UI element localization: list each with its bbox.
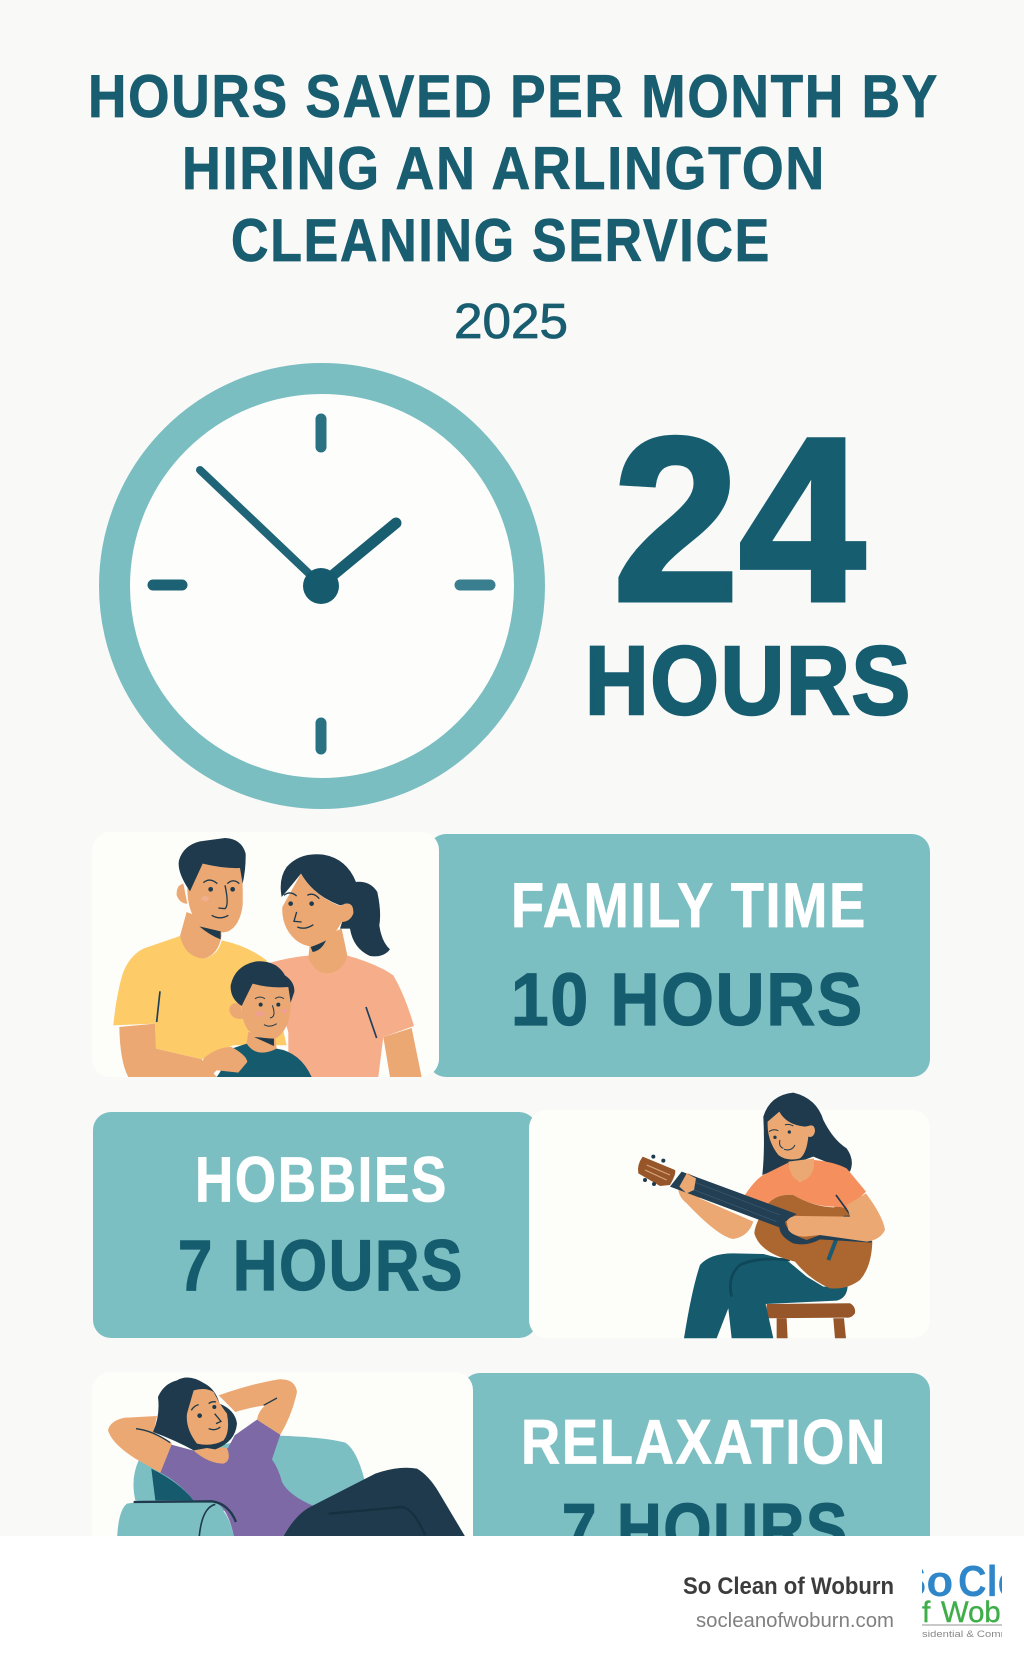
illustration: family (113, 838, 422, 1077)
chest skin (194, 1445, 229, 1464)
fretting fingers (679, 1173, 696, 1193)
illustration: woman playing guitar (638, 1093, 885, 1338)
logo, cropped (897, 1557, 1024, 1639)
panel background white (92, 1372, 473, 1562)
left arm (678, 1173, 753, 1239)
panel background teal (93, 1112, 537, 1338)
face (768, 1112, 815, 1159)
logo, cropped: So (897, 1557, 953, 1606)
logo, cropped: sidential & Comm (922, 1629, 1010, 1639)
year subtitle: 2025 (454, 295, 568, 349)
arms (108, 1416, 172, 1473)
chair arm (117, 1503, 237, 1562)
illustration: woman relaxing in armchair (108, 1378, 480, 1562)
neck (788, 1158, 814, 1181)
right arm (787, 1193, 885, 1242)
panel background teal (462, 1373, 930, 1563)
panel background white (92, 832, 439, 1077)
boy (217, 1044, 312, 1077)
panel: relaxation (92, 1372, 930, 1570)
value: 7 hours, cut off: 7 HOURS (562, 1490, 849, 1570)
footer (0, 1536, 1024, 1666)
heading: family time: FAMILY TIME (511, 871, 867, 941)
headstock (638, 1157, 675, 1186)
man (113, 936, 287, 1059)
title: HOURS SAVED PER MONTH BY (88, 63, 939, 130)
footer background (0, 1536, 1024, 1666)
guitar neck (670, 1172, 872, 1244)
website: socleanofwoburn.com (696, 1610, 894, 1632)
torso (160, 1420, 314, 1562)
panel: family time (92, 832, 930, 1077)
title (88, 63, 939, 274)
stool (767, 1303, 855, 1338)
hair (762, 1093, 852, 1175)
panel: hobbies (93, 1093, 930, 1338)
panel background teal (428, 834, 930, 1077)
shirt (745, 1160, 866, 1210)
value: 10 hours: 10 HOURS (511, 958, 864, 1041)
chair back (133, 1435, 365, 1512)
hand (202, 1047, 247, 1077)
panel background white (529, 1110, 930, 1338)
big label hours: HOURS (585, 626, 912, 735)
value: 7 hours: 7 HOURS (178, 1227, 464, 1306)
big number 24: 24 (613, 390, 865, 650)
hair (153, 1378, 237, 1450)
title: HIRING AN ARLINGTON (182, 135, 826, 202)
title: CLEANING SERVICE (231, 207, 771, 274)
legs (272, 1468, 480, 1562)
legs (684, 1253, 848, 1338)
guitar body (754, 1195, 872, 1289)
woman (267, 955, 414, 1077)
face (187, 1389, 228, 1445)
heading: relaxation: RELAXATION (521, 1408, 887, 1478)
heading: hobbies: HOBBIES (195, 1144, 448, 1216)
chair cushion shadow (151, 1469, 194, 1500)
brand name: So Clean of Woburn (683, 1573, 894, 1600)
logo, cropped: f (922, 1596, 931, 1629)
icon: clock (114, 378, 530, 794)
